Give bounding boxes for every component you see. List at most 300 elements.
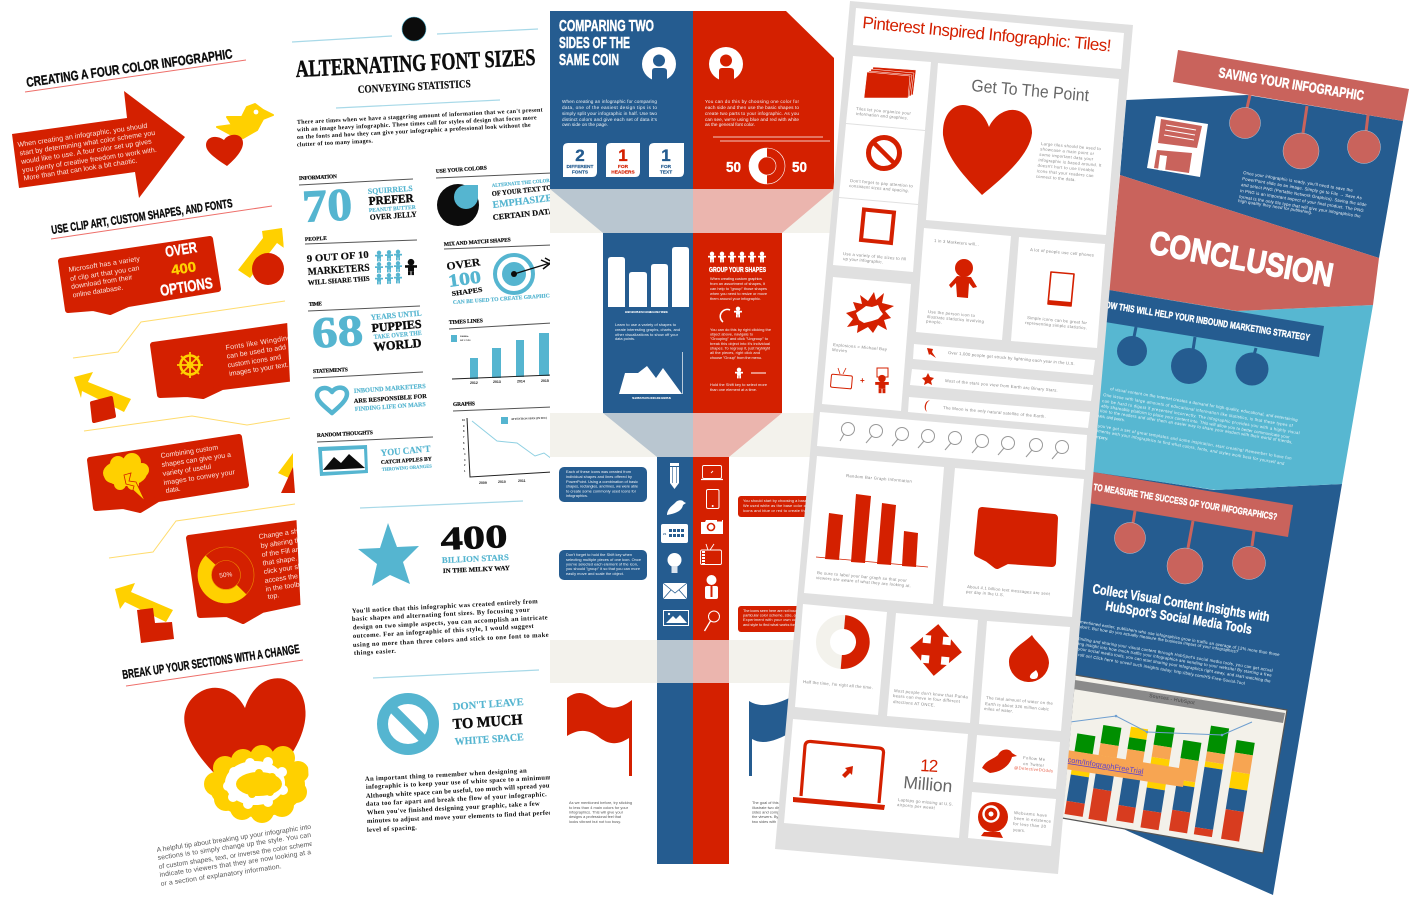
- icon: black person: [405, 259, 417, 275]
- heading: comparing two sides: COMPARING TWO: [559, 18, 654, 35]
- section: information: 70: [301, 178, 353, 232]
- text block: hubspot tools: [1078, 619, 1281, 686]
- tile: get to the point: Get To The Point: [971, 76, 1090, 105]
- tile: stars fact: [910, 369, 1093, 401]
- stat card: for headers: [606, 143, 640, 177]
- tile: lightning fact: [913, 344, 1095, 375]
- text block: goal: [752, 800, 788, 824]
- text block: goal: illustrate two distinct: [752, 805, 788, 810]
- callout: icon creation note: infographics.: [566, 493, 588, 498]
- callout: donut color box: access the controls: [264, 569, 325, 585]
- chart: 50 50 donut: 50: [792, 159, 807, 176]
- icon: people grid: [375, 250, 402, 284]
- title: ALTERNATING FONT SIZES: [295, 45, 536, 83]
- tile: lightning fact: Over 1,000 people get struck by lightning each year in the U.S.: [948, 350, 1075, 366]
- text block: inbound marketing: ably shareable platform to place your content into. This will allow you to better communicate your: [1101, 403, 1291, 440]
- tile: consistent sizes: consistent sizes and spacing.: [849, 183, 909, 193]
- tile: laptops: 12: [920, 756, 939, 776]
- icon: tv plus robot: +: [860, 376, 865, 385]
- stat card: different fonts: 2: [575, 146, 585, 165]
- icon: yellow bird: [217, 104, 273, 138]
- tile: moon fact: The Moon is the only natural satellite of the Earth.: [943, 405, 1046, 419]
- tile: marketers: [916, 228, 1011, 340]
- text block: inbound marketing: tion to the readers and offer them an easier way to share your wisdom with their world of friends,: [1100, 408, 1293, 444]
- icon: envelope: [663, 583, 687, 599]
- text block: ungrouping: choose "Group" from the menu.: [710, 355, 762, 360]
- text block: inbound marketing: [1096, 386, 1300, 466]
- text block: inbound marketing: you've got a set of great templates and some inspiration, start creating! Remember to have fun: [1098, 423, 1293, 461]
- icon: big red heart: [943, 105, 1032, 195]
- banner: saving your infographic: [1173, 50, 1409, 121]
- callout: custom shapes box: [90, 437, 246, 510]
- icon: calendar: [661, 524, 688, 543]
- section: line graph: 8: [463, 429, 465, 433]
- column: lower blue and red strips: [657, 457, 729, 864]
- icon: storm cloud: [103, 453, 149, 501]
- text block: right intro: You can do this by choosing one color for: [705, 99, 799, 104]
- section: people: 9 OUT OF 10: [306, 250, 369, 265]
- icon: cyan star: [358, 523, 419, 586]
- text block: saving steps: format is the only file type that will give your infographics the: [1239, 194, 1362, 219]
- section: statements: [313, 367, 427, 413]
- callout: custom shapes box: images to convey your: [163, 469, 236, 487]
- text block: grouping: when you need to resize or move: [710, 291, 767, 296]
- tile: consistent sizes: Don't forget to pay attention to: [850, 178, 914, 189]
- tile: get to the point: connect to the data.: [1036, 174, 1076, 182]
- text block: saving steps: in PNG is an important aspect of your final product. The PNG: [1240, 188, 1365, 213]
- tile: bar graph: Random Bar Graph Information: [846, 473, 913, 484]
- text block: breaking up sections tip: A helpful tip about breaking up your infographic into: [156, 824, 312, 854]
- callout: red color note: icons and blue or red to create the: [743, 508, 807, 513]
- tile: half donut: [795, 604, 887, 715]
- panel: comparing two sides: [550, 0, 845, 913]
- icon: laptop: [701, 466, 723, 480]
- tile: water drop: Earth is about 326 million cubic: [985, 701, 1049, 712]
- section: time: TAKE OVER THE: [374, 330, 422, 341]
- text block: white space note: [365, 768, 555, 834]
- tile: stars fact: Most of the stars you view from Earth are Binary Stars.: [945, 378, 1058, 393]
- text block: ungrouping: break this object into it's individual: [710, 341, 770, 346]
- chart: 50 percent donut: [198, 547, 254, 603]
- tile: webcams: [968, 792, 1056, 846]
- chart: half donut: [823, 615, 870, 669]
- tile: follow on twitter: @DetectiveDOdds: [1014, 765, 1053, 773]
- banner: free trial link: [1034, 750, 1185, 787]
- callout: donut color box: that shape. Simply: [262, 552, 321, 567]
- tile: move arrows: bears can move in four different: [893, 693, 961, 704]
- section: time: 68: [310, 306, 365, 358]
- section: line graph: GRAPHS: [453, 401, 475, 408]
- callout: wingdings box: Fonts like Wingdings: [225, 334, 296, 352]
- section: bar chart time lines: OF CATS: [460, 339, 471, 342]
- icon: figure and dash: [735, 368, 766, 378]
- tile: bar graph: viewers are aware of what they are looking at.: [816, 575, 911, 588]
- icon: row of people: [708, 252, 766, 262]
- section: use your colors: USE YOUR COLORS: [436, 165, 487, 175]
- section: line graph: 6: [463, 441, 465, 445]
- tile: explosions: Explosions = Michael Bay: [833, 342, 888, 352]
- heading: clip art: USE CLIP ART, CUSTOM SHAPES, AND FONTS: [50, 196, 233, 237]
- bars: [1065, 725, 1255, 842]
- icon: red heart: [206, 135, 243, 166]
- stat: don't leave too much white space: DON'T LEAVE: [452, 697, 524, 713]
- callout: wingdings box: images to your text.: [229, 362, 289, 378]
- heading: collect visual content insights: Collect Visual Content Insights with: [1092, 581, 1271, 625]
- section: information: INFORMATION: [299, 174, 337, 182]
- arrow with intro text: More than that can look a bit chaotic.: [23, 158, 138, 182]
- chart: stacked bars window: [1034, 675, 1287, 853]
- text block: saving steps: and select PNG (Portable Network Graphics). Saving the slide: [1241, 182, 1368, 207]
- tile: square: [833, 198, 918, 272]
- icon: explosion: [846, 292, 894, 333]
- text block: hubspot tools: roll on! Click here to unveil such insights today: http://bitly.com/HS-Free-Social-Tool: [1078, 652, 1245, 686]
- callout: red color note: We used white as the base color of: [743, 503, 808, 508]
- section: information: PEANUT BUTTER: [369, 205, 417, 214]
- icon: camera: [701, 520, 723, 534]
- icon: cyan no sign: [382, 698, 434, 750]
- text block: saving steps: [1238, 170, 1368, 219]
- text block: inbound marketing: of visual content on the Internet creates a demand for high-quality, educational, and entertaining: [1110, 386, 1299, 422]
- stat card: different fonts: [563, 143, 597, 177]
- section: line graph: 5: [463, 447, 465, 451]
- text block: main colors: [569, 800, 632, 824]
- text block: shapes and fonts note: using no more than three colors and stick to one font to make: [353, 632, 549, 649]
- heading: conclusion: CONCLUSION: [1147, 223, 1336, 293]
- tile: laptops: Million: [903, 772, 953, 796]
- text block: ungrouping: object above, navigate to: [710, 332, 753, 336]
- icon: yellow arrow and red circle: [238, 228, 284, 285]
- callout: wingdings box: can be used to add: [226, 344, 287, 360]
- text block: left intro: [562, 99, 658, 127]
- tile: marketers: Use the person icon to: [928, 309, 976, 318]
- callout: clip art box: OVER: [164, 239, 198, 261]
- banner: inbound marketing strategy: HOW THIS WILL HELP YOUR INBOUND MARKETING STRATEGY: [1100, 299, 1311, 344]
- text block: left intro: When creating an infographic for comparing: [562, 99, 657, 104]
- icon: clipped arrow and triangle: [278, 453, 295, 493]
- tile: laptops: [784, 719, 968, 838]
- tile: half donut: Half the time, I'm right all the time.: [803, 679, 873, 690]
- text block: intro: with an image heavy infographic. These times call for styles of design that focus more: [297, 115, 537, 133]
- section: line graph: 2009: [479, 481, 487, 485]
- icon: blue flag: [749, 695, 795, 776]
- tile: row of magnifiers: [817, 412, 1087, 470]
- callout: shift key note: Don't forget to hold the Shift key when: [566, 552, 632, 557]
- chart: stacked bars window: Sources - HubSpot: [1149, 693, 1196, 707]
- text block: goal: The goal of this is to: [752, 800, 787, 805]
- section: bar chart time lines: 2013: [493, 380, 501, 384]
- text block: learn shapes: Learn to use a variety of shapes to: [615, 322, 676, 327]
- section: statements: INBOUND MARKETERS: [354, 383, 426, 395]
- callout: icon creation note: PowerPoint. Using a combination of basic: [566, 479, 638, 484]
- callout: shift key note: selecting multiple pieces of one icon. Once: [566, 557, 641, 562]
- section: mix and match shapes: MIX AND MATCH SHAPES: [444, 237, 511, 248]
- text block: shapes and fonts note: basic shapes and alternating font sizes. By focusing your: [352, 607, 530, 623]
- tile: cell phones: [1011, 237, 1105, 348]
- arrow with intro text: you plenty of creative freedom to work with.: [22, 147, 157, 174]
- text block: right intro: each side and then use the basic shapes to: [705, 105, 799, 110]
- heading: break up your sections: BREAK UP YOUR SECTIONS WITH A CHANGE: [121, 642, 301, 682]
- text block: learn shapes: other visualizations to show off your: [615, 332, 679, 337]
- tile: follow on twitter: Follow Me: [1023, 755, 1046, 762]
- callout: shift key note: easily move and scale the object.: [566, 571, 624, 576]
- callout: clip art box: [61, 239, 218, 312]
- text block: intro: on the fonts and how they can give your infographic a professional look without the: [297, 123, 531, 141]
- callout: clip art box: online database.: [72, 285, 124, 299]
- callout: red color note: You should start by choosing a base: [743, 498, 807, 503]
- chart: 50 50 donut: 50: [726, 159, 741, 176]
- tile: organize: [846, 56, 931, 130]
- stat card: for text: TEXT: [660, 170, 672, 176]
- section: line graph: 4: [464, 452, 466, 456]
- callout: red style note: particular color scheme, size, or style.: [743, 612, 807, 618]
- tile: water drop: miles of water.: [984, 706, 1013, 714]
- stat: don't leave too much white space: WHITE SPACE: [454, 732, 524, 748]
- section: people: PEOPLE: [305, 236, 327, 243]
- text block: learn shapes: [615, 322, 680, 341]
- tile: cell phones: A lot of people use cell phones: [1030, 247, 1094, 258]
- section: mix and match shapes: OVER: [446, 256, 482, 273]
- stat: 400 billion stars: BILLION STARS: [442, 552, 509, 565]
- section: random thoughts: [317, 430, 433, 476]
- text block: left intro: data, one of the easiest design tips is to: [562, 105, 657, 110]
- icon: bird: [667, 500, 686, 515]
- heading: comparing two sides: SAME COIN: [559, 52, 619, 69]
- text block: shapes and fonts note: outcome. For an infographic of this style, I would suggest: [353, 623, 535, 640]
- text block: hubspot tools: your social media tools, you can start sharing your infographics right away, and start watching the: [1078, 646, 1272, 684]
- text block: white space note: minutes to adjust and move your elements to find that perfect: [367, 809, 555, 825]
- text block: breaking up sections tip: of custom shapes, text, or inverse the color scheme: [158, 841, 314, 871]
- panel: pinterest inspired tiles: [775, 1, 1133, 874]
- chart: 50 percent donut: 50%: [219, 571, 233, 580]
- heading: collect visual content insights: HubSpot's Social Media Tools: [1105, 598, 1253, 637]
- section: information: OVER JELLY: [370, 210, 417, 222]
- section: middle red column: [693, 233, 782, 413]
- tile: water drop: The total amount of water on the: [986, 695, 1054, 706]
- section: time: TIME: [309, 301, 322, 308]
- tile: get to the point: some important data your: [1039, 152, 1094, 162]
- section: people: [305, 236, 417, 287]
- heading: comparing two sides: [559, 18, 654, 69]
- stat card: for headers: HEADERS: [611, 170, 636, 176]
- section: bar chart time lines: 2014: [517, 380, 525, 384]
- icon: black and cyan drop: [437, 184, 479, 226]
- callout: donut color box: top.: [267, 592, 280, 601]
- text block: shapes and fonts note: [352, 598, 549, 657]
- section: bar chart time lines: 100000s: [460, 335, 468, 338]
- tile: marketers: illustrate statistics involving: [927, 314, 985, 324]
- stat card: different fonts: DIFFERENT: [567, 164, 594, 170]
- text block: goal: two sides with: [752, 819, 776, 824]
- section: line graph: ATTENTION SPAN (IN SEC): [511, 417, 547, 421]
- section: line graph: 9: [463, 424, 465, 428]
- callout: wingdings box: custom icons and: [227, 354, 282, 369]
- icon: picture frame: [318, 445, 368, 476]
- text block: shapes and fonts note: things easier.: [354, 648, 396, 657]
- section: information: PREFER: [368, 191, 414, 208]
- text block: hubspot tools: mentioned earlier, publishers who use infographics grow in traffic an average of 12% more than those: [1080, 619, 1281, 657]
- section: use your colors: CERTAIN DATA: [492, 207, 555, 222]
- text block: main colors: to less than 4 main colors for your: [569, 805, 629, 810]
- stat card: for headers: FOR: [618, 164, 629, 170]
- icon: red flag: [567, 693, 632, 776]
- callout: icon creation note: to create some commonly used icons for: [566, 488, 637, 494]
- tile: laptops: airports per week!: [897, 802, 935, 810]
- tile: explosions: Movies: [832, 347, 847, 353]
- callout: shift key note: you should "group" it so that you can more: [566, 566, 640, 571]
- text block: grouping: them around your infographic.: [710, 296, 761, 301]
- section: mix and match shapes: 100: [447, 267, 482, 291]
- callout: clip art box: 400: [170, 258, 197, 278]
- section: mix and match shapes: CAN BE USED TO CREATE GRAPHICS: [453, 293, 553, 306]
- section: mix and match shapes: [444, 237, 554, 306]
- section: line graph: [453, 401, 552, 485]
- section: line graph: 2010: [498, 480, 506, 484]
- line overlay: [1070, 715, 1252, 736]
- banner: inbound marketing strategy: [1100, 290, 1324, 357]
- section: middle blue column: SHAPES THAT LOOK LIKE GRAPHS: [632, 396, 671, 400]
- icon: cyan heart outline: [317, 388, 347, 413]
- icon: picture: [664, 610, 688, 626]
- icon: light bulb: [668, 553, 682, 573]
- tile: water drop: [979, 621, 1070, 731]
- section: random thoughts: YOU CAN'T: [380, 445, 432, 459]
- text block: ungrouping: "Grouping" and click "Ungroup" to: [710, 336, 768, 341]
- heading: group your shapes: GROUP YOUR SHAPES: [709, 267, 766, 274]
- tile: cell phones: Simple icons can be great for: [1027, 315, 1088, 325]
- callout: custom shapes box: Combining custom: [160, 444, 219, 460]
- section: line graph: 2011: [518, 479, 526, 483]
- section: top blue half: [550, 11, 693, 189]
- callout: icon creation note: individual shapes and lines offered by: [566, 474, 632, 479]
- text block: inbound marketing: ues, and peers.: [1098, 413, 1125, 422]
- stat: don't leave too much white space: [452, 697, 524, 748]
- icon: calendar: 21: [663, 532, 667, 536]
- icon: stacked tiles: [864, 67, 916, 98]
- text block: white space note: infographic is to keep your use of white space to a minimum.: [366, 774, 553, 791]
- text block: breaking up sections tip: or a section of explanatory information.: [160, 863, 282, 888]
- callout: donut color box: [189, 522, 332, 621]
- text block: inbound marketing: can be hard to digest if presented incorrectly. The infographic provides you with a highly visual: [1102, 398, 1300, 435]
- banner: measure the success: TO MEASURE THE SUCCESS OF YOUR INFOGRAPHICS?: [1093, 482, 1278, 523]
- section: use your colors: EMPHASIZE: [492, 193, 553, 211]
- icon: water drop: [1009, 635, 1049, 682]
- text block: grouping: [710, 276, 767, 301]
- icon: yellow explosion cloud: [204, 745, 309, 823]
- section: random thoughts: THROWING ORANGES: [382, 464, 432, 473]
- panel: alternating font sizes: [272, 0, 560, 913]
- callout: icon creation note: shapes, rectangles, and lines, we were able: [566, 484, 638, 488]
- section: people: MARKETERS: [307, 263, 370, 278]
- icon: circles on stems: [1230, 95, 1380, 169]
- text block: shift key: [710, 382, 767, 392]
- stat card: for text: FOR: [661, 164, 672, 170]
- section: statements: ARE RESPONSIBLE FOR: [354, 393, 427, 405]
- text block: inbound marketing: iments with your infographics to find what colors, fonts, and styles work best for yourself and: [1097, 428, 1285, 466]
- text block: main colors: looks vibrant but not too busy.: [569, 819, 621, 824]
- tile: get to the point: icons that your readers can: [1037, 168, 1094, 178]
- callout: clip art box: Microsoft has a variety: [68, 256, 141, 274]
- text block: left intro: simply split your infographic in half. Use two: [562, 111, 657, 116]
- icon: person in circle: [642, 47, 676, 81]
- text block: hubspot tools: ing insight into how much traffic your infographics are sending to your website! By starting a free: [1078, 641, 1273, 678]
- icon: tablet: [706, 490, 719, 508]
- callout: red color note: [738, 496, 828, 517]
- callout: clip art box: of clip art that you can: [70, 265, 140, 283]
- icon: target with arrow: [495, 255, 554, 293]
- section: use your colors: OF YOUR TEXT TO: [491, 184, 552, 198]
- text block: grouping: can help to "group" those shapes: [710, 286, 767, 291]
- text block: intro: clutter of too many images.: [297, 139, 373, 148]
- icon: ship wheel: [177, 352, 203, 378]
- text block: saving steps: high quality they need for publishing.: [1238, 198, 1313, 215]
- text block: intro: There are times when we have a staggering amount of information that we can't present: [297, 108, 543, 126]
- text block: grouping: from an assortment of shapes, it: [710, 281, 766, 286]
- section: time: PUPPIES: [371, 317, 422, 335]
- tile: square: up your infographic.: [843, 256, 883, 264]
- text block: goal: sides and compare: [752, 810, 785, 814]
- tile: moon fact: [908, 397, 1090, 428]
- tile: speech bubble: [943, 468, 1084, 617]
- callout: donut color box: by altering the color: [260, 534, 322, 550]
- section: bar chart time lines: 2012: [470, 381, 478, 385]
- stat card: for headers: 1: [618, 146, 628, 165]
- tile: organize: Tiles let you organize your: [856, 106, 912, 116]
- tile: move arrows: directions AT ONCE.: [893, 699, 935, 708]
- section: people: WILL SHARE THIS: [308, 275, 370, 287]
- section: line graph: 2: [464, 463, 466, 467]
- text block: right intro: create two parts to your infographic. As you: [705, 111, 799, 116]
- text block: shift key: Hold the Shift key to select more: [710, 382, 767, 387]
- callout: donut color box: in the toolbar at the: [265, 578, 326, 593]
- chart: white rounded bars: [608, 247, 689, 307]
- stat: 400 billion stars: IN THE MILKY WAY: [443, 565, 510, 575]
- icon: floppy disk: [1147, 116, 1208, 177]
- callout: shift key note: you've selected each element of the icon,: [566, 562, 638, 566]
- tile: speech bubble: About 4.1 billion text messages are sent: [967, 584, 1051, 596]
- stat: 400 billion stars: 400: [440, 519, 508, 558]
- text block: ungrouping: You can do this by right clicking the: [710, 327, 771, 332]
- tile: move arrows: Most people don't know that Panda: [894, 688, 969, 700]
- icon: yellow arrow and red square: [74, 372, 131, 421]
- tile: get to the point: doesn't hurt to use liveable: [1037, 163, 1095, 173]
- arrow with intro text: start by determining what color scheme you: [19, 130, 156, 157]
- text block: learn shapes: create interesting graphs, charts, and: [615, 327, 680, 332]
- text block: grouping: When creating custom graphics: [710, 276, 762, 281]
- text block: left intro: distinct colors and give each set of data it's: [562, 117, 658, 122]
- text block: main colors: As we mentioned before, try sticking: [569, 800, 632, 805]
- text block: goal: the viewers. By: [752, 814, 778, 819]
- callout: icon creation note: [559, 467, 647, 502]
- section: top red half: [693, 11, 834, 189]
- section: use your colors: [436, 165, 555, 226]
- icon: large red heart: [184, 678, 306, 798]
- text block: shapes and fonts note: design on two simple aspects, you can accomplish an intricate: [353, 614, 548, 631]
- text block: left intro: own side on the page.: [562, 122, 608, 127]
- chart: mountain area shape: [619, 352, 682, 394]
- arrow with intro text: [12, 91, 185, 198]
- text block: right intro: can see, we're using blue and red with white: [705, 117, 799, 122]
- stat card: different fonts: FONTS: [572, 170, 589, 176]
- icon: coral circles on stems: [1114, 511, 1266, 584]
- panel: four color infographic: [12, 46, 332, 888]
- icon: person with tie: [705, 575, 718, 599]
- stat card: for text: [649, 143, 684, 177]
- text block: main colors: infographics. This will give your: [569, 810, 624, 814]
- text block: ungrouping: all the pieces, right click and: [710, 350, 760, 355]
- icon: magnifier: [704, 611, 720, 631]
- section: mix and match shapes: SHAPES: [451, 286, 483, 298]
- icon: person in circle: [709, 47, 743, 81]
